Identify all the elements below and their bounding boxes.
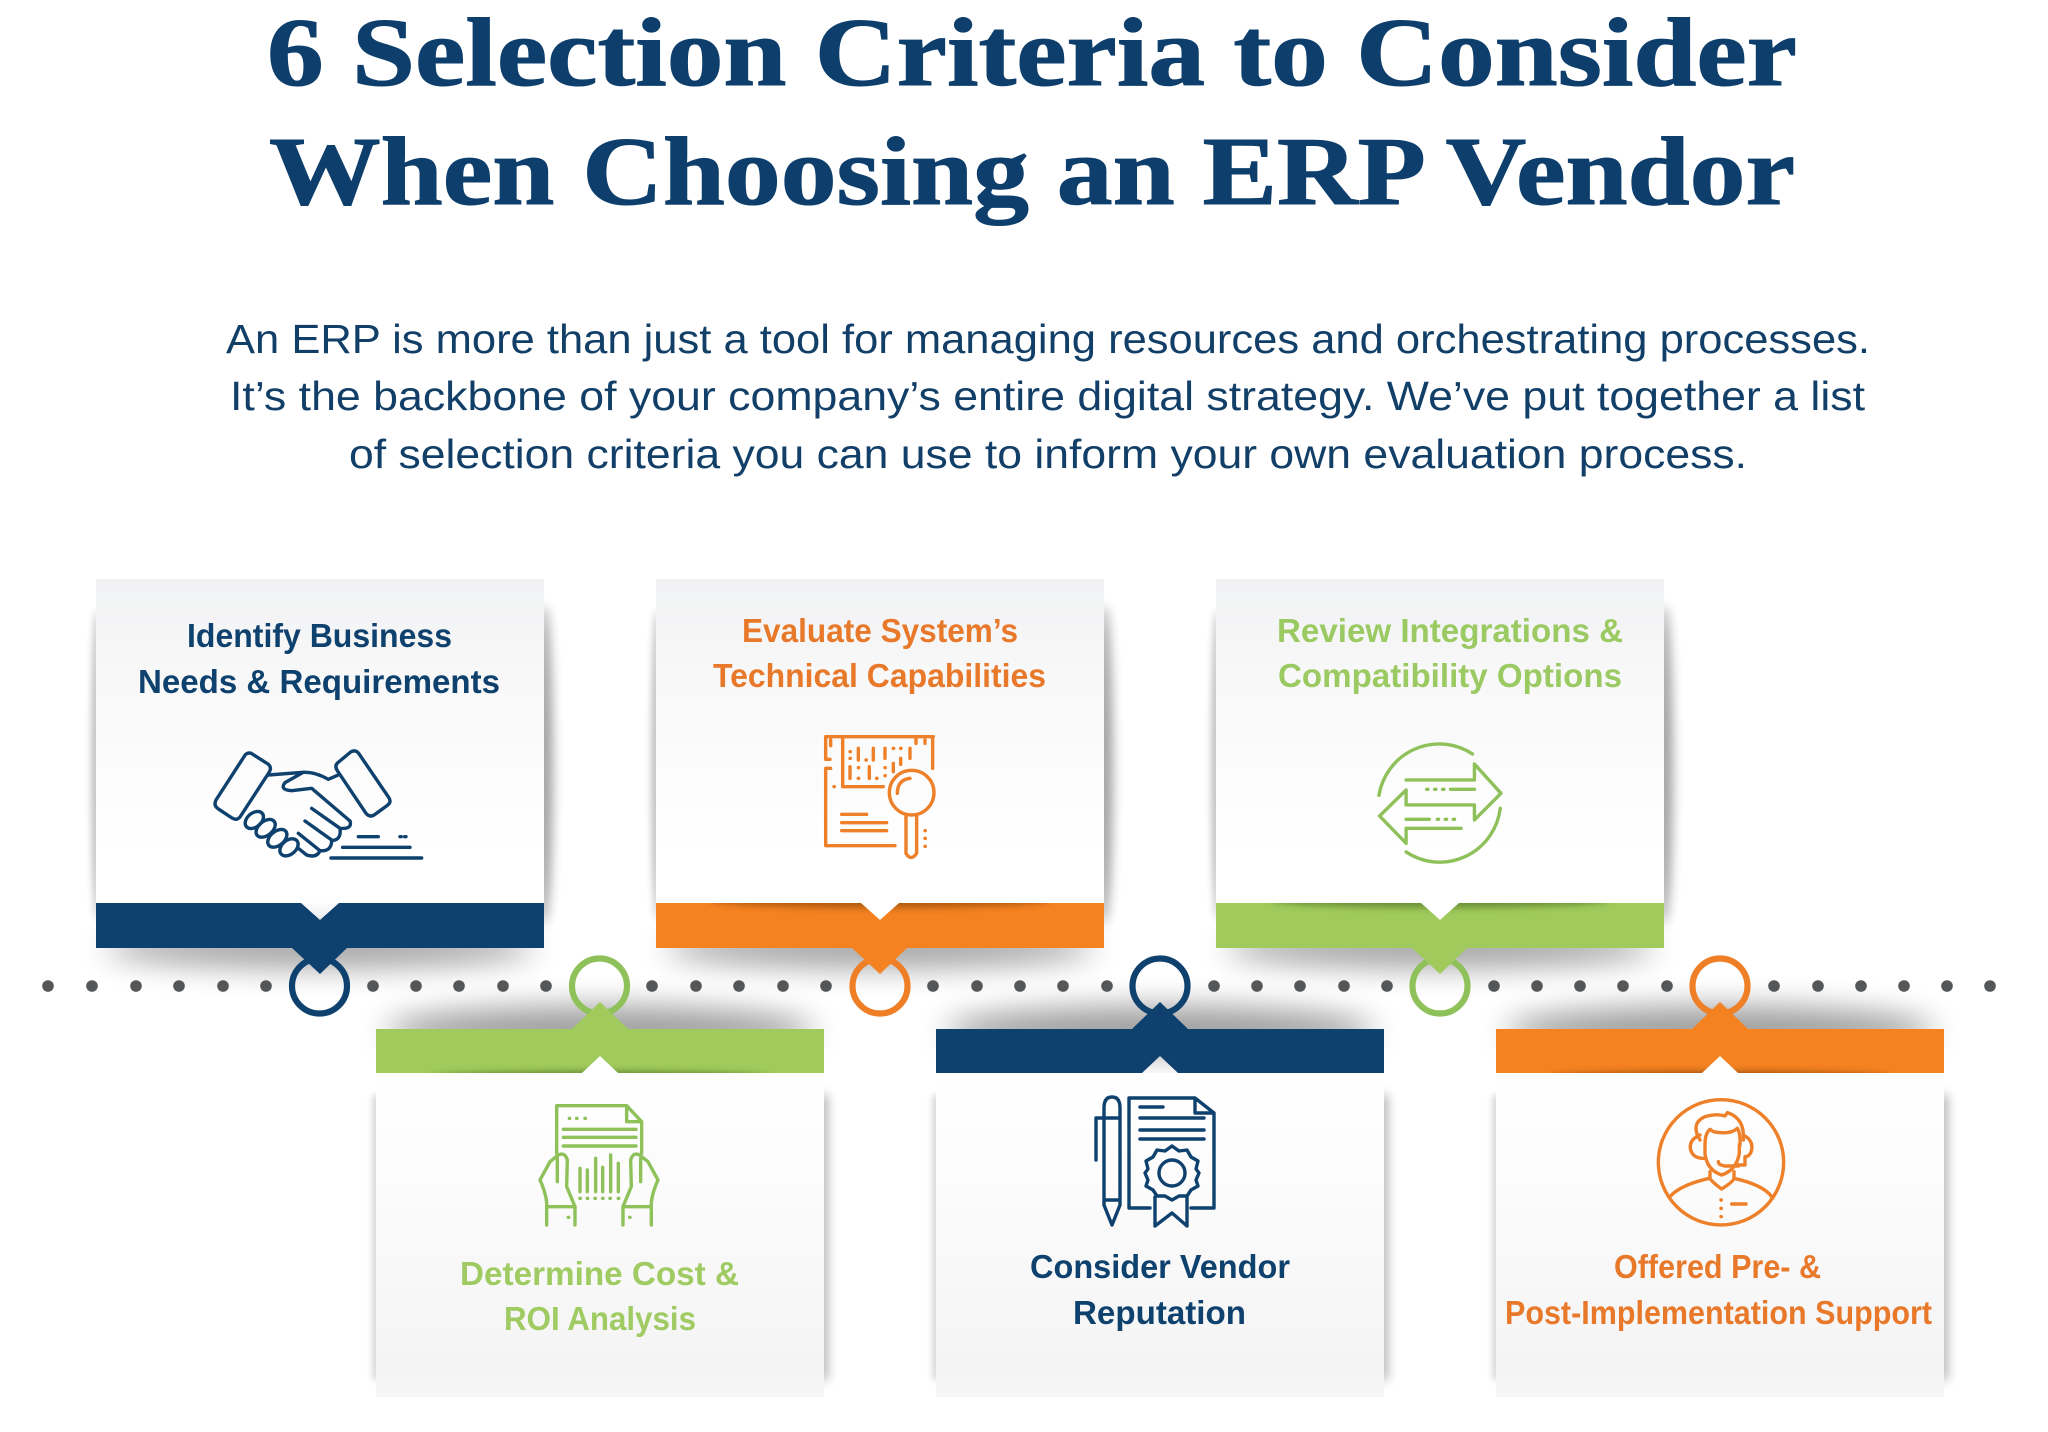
icon: support agent: [1658, 1100, 1784, 1225]
notch: [1702, 1056, 1738, 1073]
icon: exchange arrows in circle: [1379, 744, 1501, 862]
icon: certificate with pen: [1096, 1097, 1214, 1226]
card shadows: [91, 605, 1947, 1380]
heading: Reputation: [1073, 1294, 1246, 1331]
intro paragraph: An ERP is more than just a tool for managing resources and orchestrating processes.: [226, 316, 1870, 362]
heading: [1030, 1248, 1290, 1331]
heading: Review Integrations &: [1277, 612, 1623, 649]
panel: determine cost and ROI: [376, 1002, 824, 1397]
heading: [713, 612, 1046, 694]
heading: Consider Vendor: [1030, 1248, 1290, 1285]
heading: [138, 617, 500, 700]
title: [267, 0, 1797, 226]
colour band: [376, 1002, 824, 1073]
heading: Compatibility Options: [1278, 657, 1622, 694]
panel: consider vendor reputation: [936, 1002, 1384, 1397]
heading: Evaluate System’s: [742, 612, 1018, 649]
intro paragraph: It’s the backbone of your company’s entire digital strategy. We’ve put together a list: [230, 373, 1866, 419]
heading: Technical Capabilities: [713, 657, 1046, 694]
colour band: [1216, 903, 1664, 974]
colour band: [1496, 1002, 1944, 1073]
band shading: [1553, 1067, 1887, 1073]
heading: [1505, 1248, 1932, 1331]
title: When Choosing an ERP Vendor: [269, 118, 1795, 226]
panel: pre and post implementation support: [1496, 1002, 1944, 1397]
notch: [1421, 903, 1459, 920]
icon: document with magnifier: [826, 737, 934, 857]
band shading: [1272, 903, 1608, 912]
intro paragraph: of selection criteria you can use to inform your own evaluation process.: [349, 431, 1747, 477]
notch: [582, 1056, 618, 1073]
panel: identify business needs: [96, 579, 544, 974]
icon: handshake: [215, 751, 422, 859]
heading: Needs & Requirements: [138, 663, 500, 700]
heading: [460, 1255, 739, 1337]
colour band: [936, 1002, 1384, 1073]
panel: review integrations: [1216, 579, 1664, 974]
heading: [1277, 612, 1623, 694]
heading: Offered Pre- &: [1614, 1248, 1821, 1285]
notch: [861, 903, 899, 920]
dotted timeline: [42, 980, 1996, 992]
heading: Post-Implementation Support: [1505, 1294, 1932, 1331]
colour band: [96, 903, 544, 974]
band shading: [711, 903, 1049, 912]
panel: evaluate technical capabilities: [656, 579, 1104, 974]
timeline rings: [292, 958, 1748, 1014]
heading: Determine Cost &: [460, 1255, 739, 1292]
intro paragraph: [226, 316, 1870, 477]
band shading: [434, 1067, 766, 1073]
title: 6 Selection Criteria to Consider: [267, 0, 1797, 107]
colour band: [656, 903, 1104, 974]
heading: Identify Business: [187, 617, 452, 654]
icon: report held in hands: [540, 1106, 658, 1225]
heading: ROI Analysis: [504, 1300, 696, 1337]
